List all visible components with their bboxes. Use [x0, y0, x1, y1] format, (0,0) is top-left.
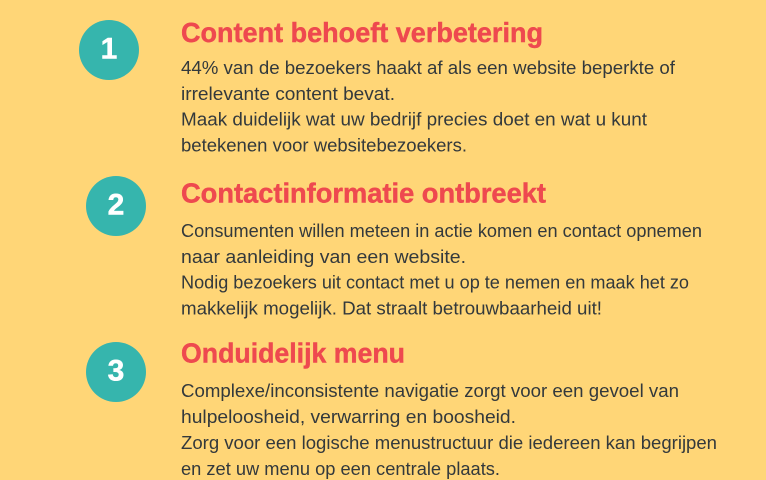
text block: menu	[181, 381, 717, 479]
text block: contact: Nodig bezoekers uit contact met u op te nemen en maak het zo	[181, 272, 689, 292]
text block: contact	[181, 221, 702, 318]
text block: content: betekenen voor websitebezoekers.	[181, 136, 467, 156]
text block: content: 44% van de bezoekers haakt af als een website beperkte of	[181, 58, 676, 78]
text block: content: Maak duidelijk wat uw bedrijf precies doet en wat u kunt	[181, 110, 647, 130]
heading: contact: Contactinformatie ontbreekt	[181, 178, 546, 208]
icon: number 2 badge: 2	[108, 188, 124, 222]
icon: number 1 badge	[79, 20, 139, 80]
text block: contact: Consumenten willen meteen in actie komen en contact opnemen	[181, 221, 702, 241]
icon: number 1 badge: 1	[101, 32, 117, 66]
icon: number 3 badge: 3	[108, 354, 124, 388]
text block: content: irrelevante content bevat.	[181, 84, 395, 104]
text block: menu: Complexe/inconsistente navigatie zorgt voor een gevoel van	[181, 381, 679, 401]
heading: content: Content behoeft verbetering	[181, 17, 543, 48]
text block: menu: hulpeloosheid, verwarring en boosheid.	[181, 407, 516, 427]
text block: menu: Zorg voor een logische menustructuur die iedereen kan begrijpen	[181, 433, 717, 453]
text block: content	[181, 58, 676, 156]
icon: number 2 badge	[86, 176, 146, 236]
icon: number 3 badge	[86, 342, 146, 402]
panel: item 2	[86, 176, 702, 318]
panel: item 1	[79, 17, 676, 156]
heading: menu: Onduidelijk menu	[181, 338, 405, 368]
text block: contact: naar aanleiding van een website.	[181, 247, 466, 267]
panel: item 3	[86, 338, 717, 479]
text block: menu: en zet uw menu op een centrale plaats.	[181, 459, 500, 479]
text block: contact: makkelijk mogelijk. Dat straalt betrouwbaarheid uit!	[181, 298, 602, 318]
